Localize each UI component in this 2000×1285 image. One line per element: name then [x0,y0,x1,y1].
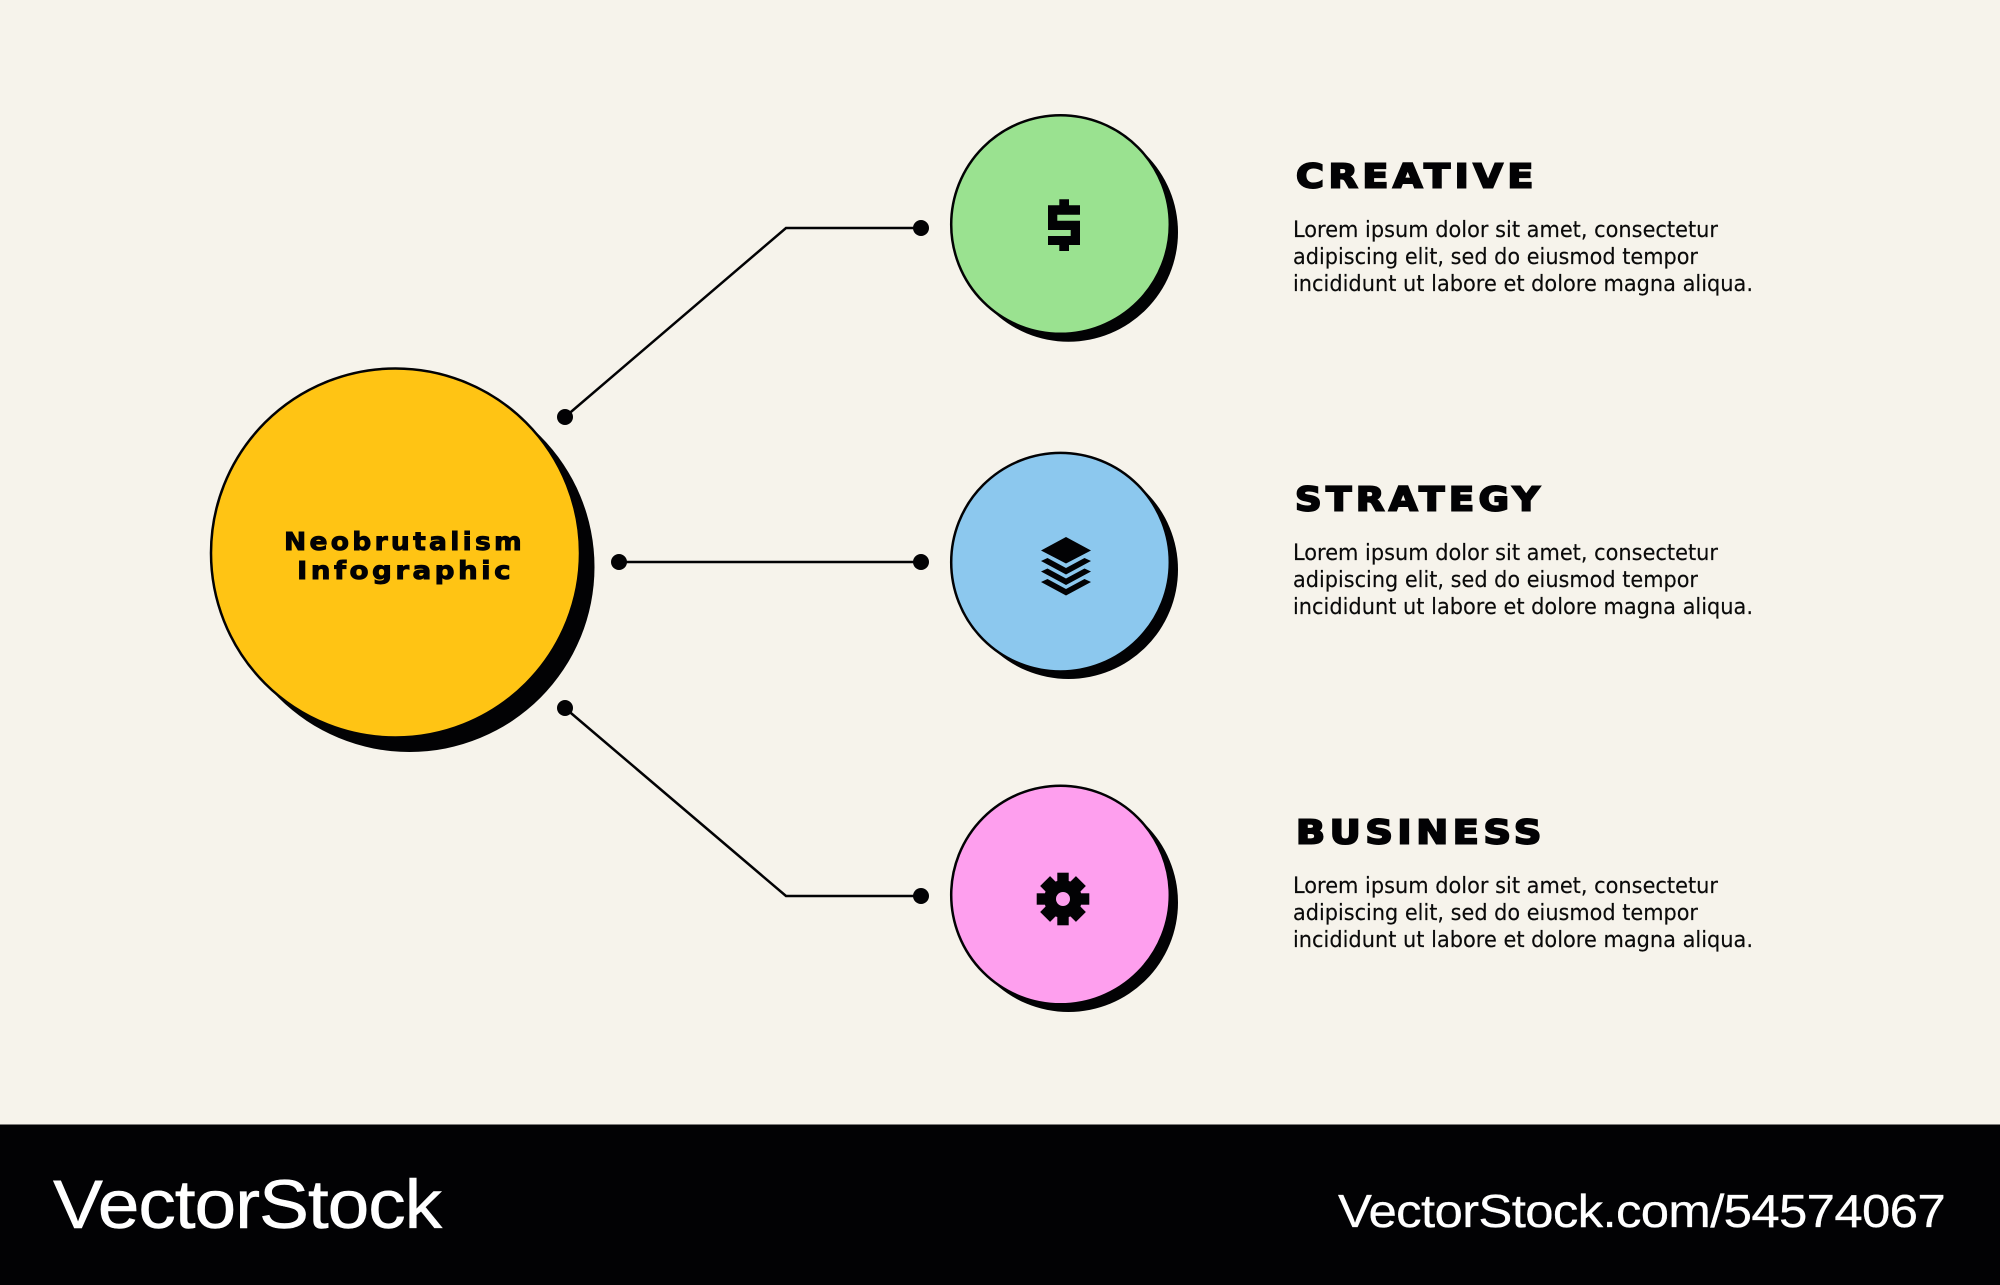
text block: creative: incididunt ut labore et dolore magna aliqua. [1293,272,1753,297]
connector: top [557,220,929,425]
text block: strategy: adipiscing elit, sed do eiusmod tempor [1293,568,1699,593]
footer bar [0,1124,2000,1285]
connector: middle [611,554,929,570]
icon: layers [1041,537,1091,596]
text block: creative: Lorem ipsum dolor sit amet, consectetur [1293,218,1719,243]
text block: business: incididunt ut labore et dolore magna aliqua. [1293,928,1753,953]
text block: business: BUSINESS [1296,812,1546,852]
footer url: VectorStock.com/54574067 [1338,1185,1945,1237]
text block: strategy [1293,480,1753,620]
text block: strategy: Lorem ipsum dolor sit amet, consectetur [1293,541,1719,566]
text block: creative: CREATIVE [1296,156,1538,196]
circle: creative with dollar icon [951,115,1178,342]
circle: strategy with layers icon [951,453,1178,679]
text block: business: Lorem ipsum dolor sit amet, consectetur [1293,874,1719,899]
connector: bottom [557,700,929,904]
icon: dollar sign [1048,199,1080,251]
central circle with title [211,368,594,752]
text block: strategy: STRATEGY [1295,480,1544,518]
text block: business: adipiscing elit, sed do eiusmod tempor [1293,901,1699,926]
central circle with title: Neobrutalism [284,527,525,556]
footer logo: VectorStock [53,1166,443,1243]
text block: strategy: incididunt ut labore et dolore magna aliqua. [1293,595,1753,620]
icon: gear [1037,873,1089,925]
text block: creative: adipiscing elit, sed do eiusmod tempor [1293,245,1699,270]
circle: business with gear icon [951,786,1178,1012]
central circle with title: Infographic [297,556,514,585]
text block: creative [1293,156,1753,297]
text block: business [1293,812,1753,953]
